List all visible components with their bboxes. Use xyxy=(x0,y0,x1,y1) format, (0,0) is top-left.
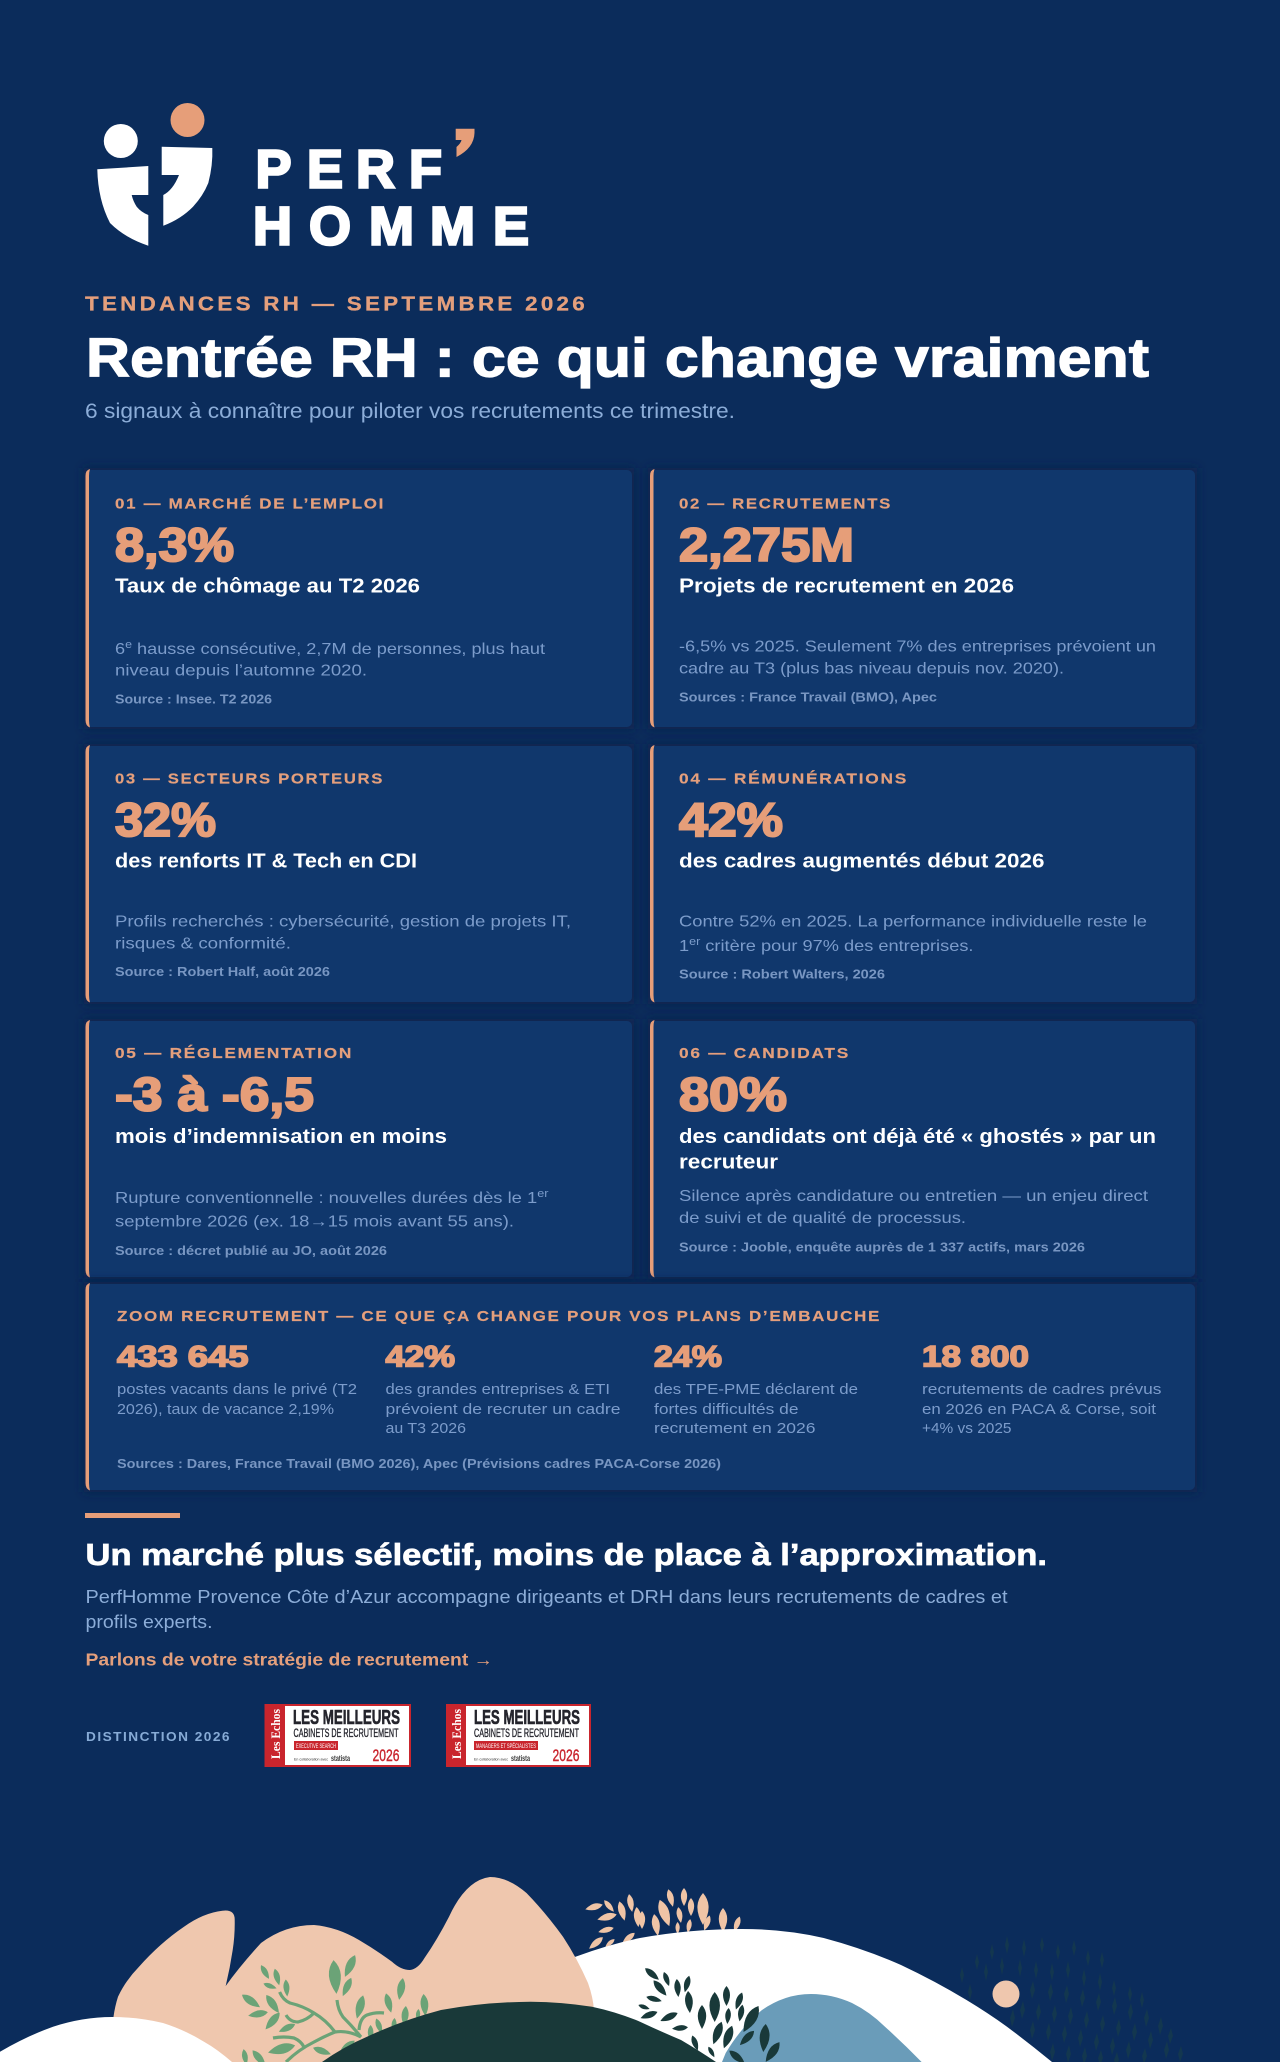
hill: white left xyxy=(0,2017,232,2062)
badge: Managers et spécialistes: CABINETS DE RECRUTEMENT xyxy=(474,1726,579,1740)
source: Sources : France Travail (BMO), Apec xyxy=(679,689,937,704)
description: critère pour 97% des entreprises. xyxy=(700,938,974,955)
description xyxy=(115,639,546,680)
source: Source : Robert Walters, 2026 xyxy=(679,966,885,982)
wordmark: HOMME xyxy=(253,196,529,256)
description xyxy=(115,1188,549,1230)
label: 03 — SECTEURS PORTEURS xyxy=(115,770,384,788)
wordmark xyxy=(253,129,529,256)
eyebrow: TENDANCES RH — SEPTEMBRE 2026 xyxy=(85,293,588,316)
card 05: réglementation xyxy=(84,1019,634,1279)
headline: recruteur xyxy=(679,1152,778,1174)
description: 6 xyxy=(115,641,124,658)
badge: Managers et spécialistes: En collaboration avec xyxy=(474,1758,508,1762)
dot: peach xyxy=(992,1980,1020,2008)
description: risques & conformité. xyxy=(115,935,291,952)
stat: grandes entreprises: 42% xyxy=(386,1340,455,1374)
headline: mois d’indemnisation en moins xyxy=(115,1126,447,1148)
description: er xyxy=(689,936,701,948)
description: septembre 2026 (ex. 18→15 mois avant 55 ans). xyxy=(115,1214,514,1230)
description: Contre 52% en 2025. La performance individuelle reste le xyxy=(679,914,1147,931)
description xyxy=(679,1188,1149,1227)
closing text xyxy=(86,1587,1008,1632)
closing accent rule xyxy=(85,1513,180,1518)
description: Rupture conventionnelle : nouvelles durées dès le 1 xyxy=(115,1190,482,1207)
stat: PACA & Corse: 18 800 xyxy=(922,1340,1029,1374)
wordmark: PERF xyxy=(256,140,442,200)
headline: des candidats ont déjà été « ghostés » par un xyxy=(679,1126,1156,1148)
badge: Executive Search: En collaboration avec xyxy=(294,1758,328,1762)
panel: zoom recrutement xyxy=(84,1282,1197,1492)
badge: Managers et spécialistes: 2026 xyxy=(552,1746,580,1765)
card 02: recrutements xyxy=(648,468,1197,729)
card 04: rémunérations xyxy=(648,744,1197,1004)
headline: Projets de recrutement en 2026 xyxy=(679,576,1014,598)
call to action link: Parlons de votre stratégie de recrutement → xyxy=(86,1650,493,1670)
headline: des renforts IT & Tech en CDI xyxy=(115,851,417,873)
badge: Managers et spécialistes: Les Echos xyxy=(449,1709,464,1759)
headline xyxy=(679,1126,1156,1174)
stat: PACA & Corse: recrutements de cadres prévus xyxy=(922,1381,1162,1398)
badge: Managers et spécialistes: MANAGERS ET SPÉCIALISTES xyxy=(476,1743,536,1750)
label: 04 — RÉMUNÉRATIONS xyxy=(679,770,908,788)
badge: Managers et spécialistes: statista xyxy=(511,1754,530,1763)
stat: TPE-PME xyxy=(654,1340,858,1437)
headline: Taux de chômage au T2 2026 xyxy=(115,576,420,598)
panel sources: Sources : Dares, France Travail (BMO 2026), Apec (Prévisions cadres PACA-Corse 2026) xyxy=(117,1456,721,1471)
stat: PACA & Corse: en 2026 en PACA & Corse, soit xyxy=(922,1401,1157,1418)
description: Silence après candidature ou entretien — un enjeu direct xyxy=(679,1188,1149,1205)
description: de suivi et de qualité de processus. xyxy=(679,1210,966,1227)
hill: white right xyxy=(560,1929,1052,2062)
hill: blue xyxy=(722,1994,922,2062)
description xyxy=(115,914,571,952)
card 03: secteurs porteurs xyxy=(84,744,634,1004)
stat: postes vacants xyxy=(117,1340,357,1418)
distinction label: DISTINCTION 2026 xyxy=(86,1729,231,1744)
source: Source : Insee. T2 2026 xyxy=(115,692,272,706)
source: Source : Jooble, enquête auprès de 1 337 actifs, mars 2026 xyxy=(679,1240,1085,1254)
card 06: candidats xyxy=(648,1019,1197,1279)
source: Source : Robert Half, août 2026 xyxy=(115,964,330,979)
stat: PACA & Corse: +4% vs 2025 xyxy=(922,1420,1012,1437)
figure: -3 à -6,5 xyxy=(115,1068,314,1120)
description: Profils recherchés : cybersécurité, gestion de projets IT, xyxy=(115,914,571,931)
stat: postes vacants: 2026), taux de vacance 2,19% xyxy=(117,1401,334,1418)
description: niveau depuis l’automne 2020. xyxy=(115,662,367,680)
description xyxy=(679,914,1147,955)
figure: 2,275M xyxy=(679,518,854,571)
figure: 32% xyxy=(115,793,216,846)
icon: two figures xyxy=(97,103,212,246)
headline: des cadres augmentés début 2026 xyxy=(679,851,1044,873)
stat: PACA & Corse xyxy=(922,1340,1162,1437)
badge: Executive Search: CABINETS DE RECRUTEMENT xyxy=(294,1726,399,1740)
badge: Executive Search: statista xyxy=(331,1754,350,1763)
title: Rentrée RH : ce qui change vraiment xyxy=(86,327,1149,389)
stat: postes vacants: postes vacants dans le privé (T2 xyxy=(117,1381,357,1398)
stat: TPE-PME: recrutement en 2026 xyxy=(654,1420,816,1437)
foliage: faint dark leaves on navy xyxy=(960,1936,1183,2062)
source: Source : décret publié au JO, août 2026 xyxy=(115,1243,387,1258)
badge: Executive Search xyxy=(264,1704,411,1767)
logo: Perf'Homme xyxy=(97,103,529,256)
stat: grandes entreprises xyxy=(386,1340,620,1437)
badge: Executive Search: LES MEILLEURS xyxy=(293,1707,400,1729)
hill: peach xyxy=(114,1877,600,2062)
closing heading: Un marché plus sélectif, moins de place à l’approximation. xyxy=(86,1537,1047,1572)
stat: grandes entreprises: prévoient de recruter un cadre xyxy=(386,1401,620,1418)
hill: dark green xyxy=(322,2002,716,2062)
description xyxy=(679,639,1156,677)
closing text: profils experts. xyxy=(86,1612,212,1632)
stat: grandes entreprises: au T3 2026 xyxy=(386,1420,466,1437)
badge: Executive Search: EXECUTIVE SEARCH xyxy=(296,1743,336,1750)
label: 01 — MARCHÉ DE L’EMPLOI xyxy=(115,496,385,512)
description: er xyxy=(537,1188,549,1200)
panel heading: ZOOM RECRUTEMENT — CE QUE ÇA CHANGE POUR VOS PLANS D’EMBAUCHE xyxy=(117,1308,881,1325)
label: 06 — CANDIDATS xyxy=(679,1045,850,1062)
foliage: dark leaves xyxy=(638,1966,783,2062)
label: 02 — RECRUTEMENTS xyxy=(679,496,892,512)
description: -6,5% vs 2025. Seulement 7% des entreprises prévoient un xyxy=(679,639,1156,656)
description: cadre au T3 (plus bas niveau depuis nov. 2020). xyxy=(679,660,1064,677)
stat: TPE-PME: 24% xyxy=(654,1340,722,1374)
card 01: marché de l'emploi xyxy=(84,468,634,729)
label: 05 — RÉGLEMENTATION xyxy=(115,1045,353,1062)
stat: TPE-PME: des TPE-PME déclarent de xyxy=(654,1381,858,1398)
badge: Executive Search: 2026 xyxy=(372,1746,400,1765)
badge: Executive Search: Les Echos xyxy=(268,1709,283,1759)
description: hausse consécutive, 2,7M de personnes, plus haut xyxy=(132,641,546,658)
foliage: peach leaves xyxy=(584,1888,742,1951)
badge: Managers et spécialistes: LES MEILLEURS xyxy=(474,1707,580,1729)
illustration: hills and foliage xyxy=(0,1877,1183,2062)
badge: Managers et spécialistes xyxy=(446,1704,591,1767)
stat: grandes entreprises: des grandes entreprises & ETI xyxy=(386,1381,610,1398)
subtitle: 6 signaux à connaître pour piloter vos recrutements ce trimestre. xyxy=(85,400,735,423)
figure: 80% xyxy=(679,1068,787,1120)
figure: 42% xyxy=(679,793,783,846)
stat: TPE-PME: fortes difficultés de xyxy=(654,1401,798,1418)
closing text: PerfHomme Provence Côte d’Azur accompagne dirigeants et DRH dans leurs recrutements de cadres et xyxy=(86,1587,1008,1607)
description: e xyxy=(125,639,132,651)
figure: 8,3% xyxy=(115,518,234,571)
foliage: green sprig xyxy=(240,1953,429,2062)
stat: postes vacants: 433 645 xyxy=(117,1340,248,1374)
description: 1 xyxy=(679,938,688,955)
